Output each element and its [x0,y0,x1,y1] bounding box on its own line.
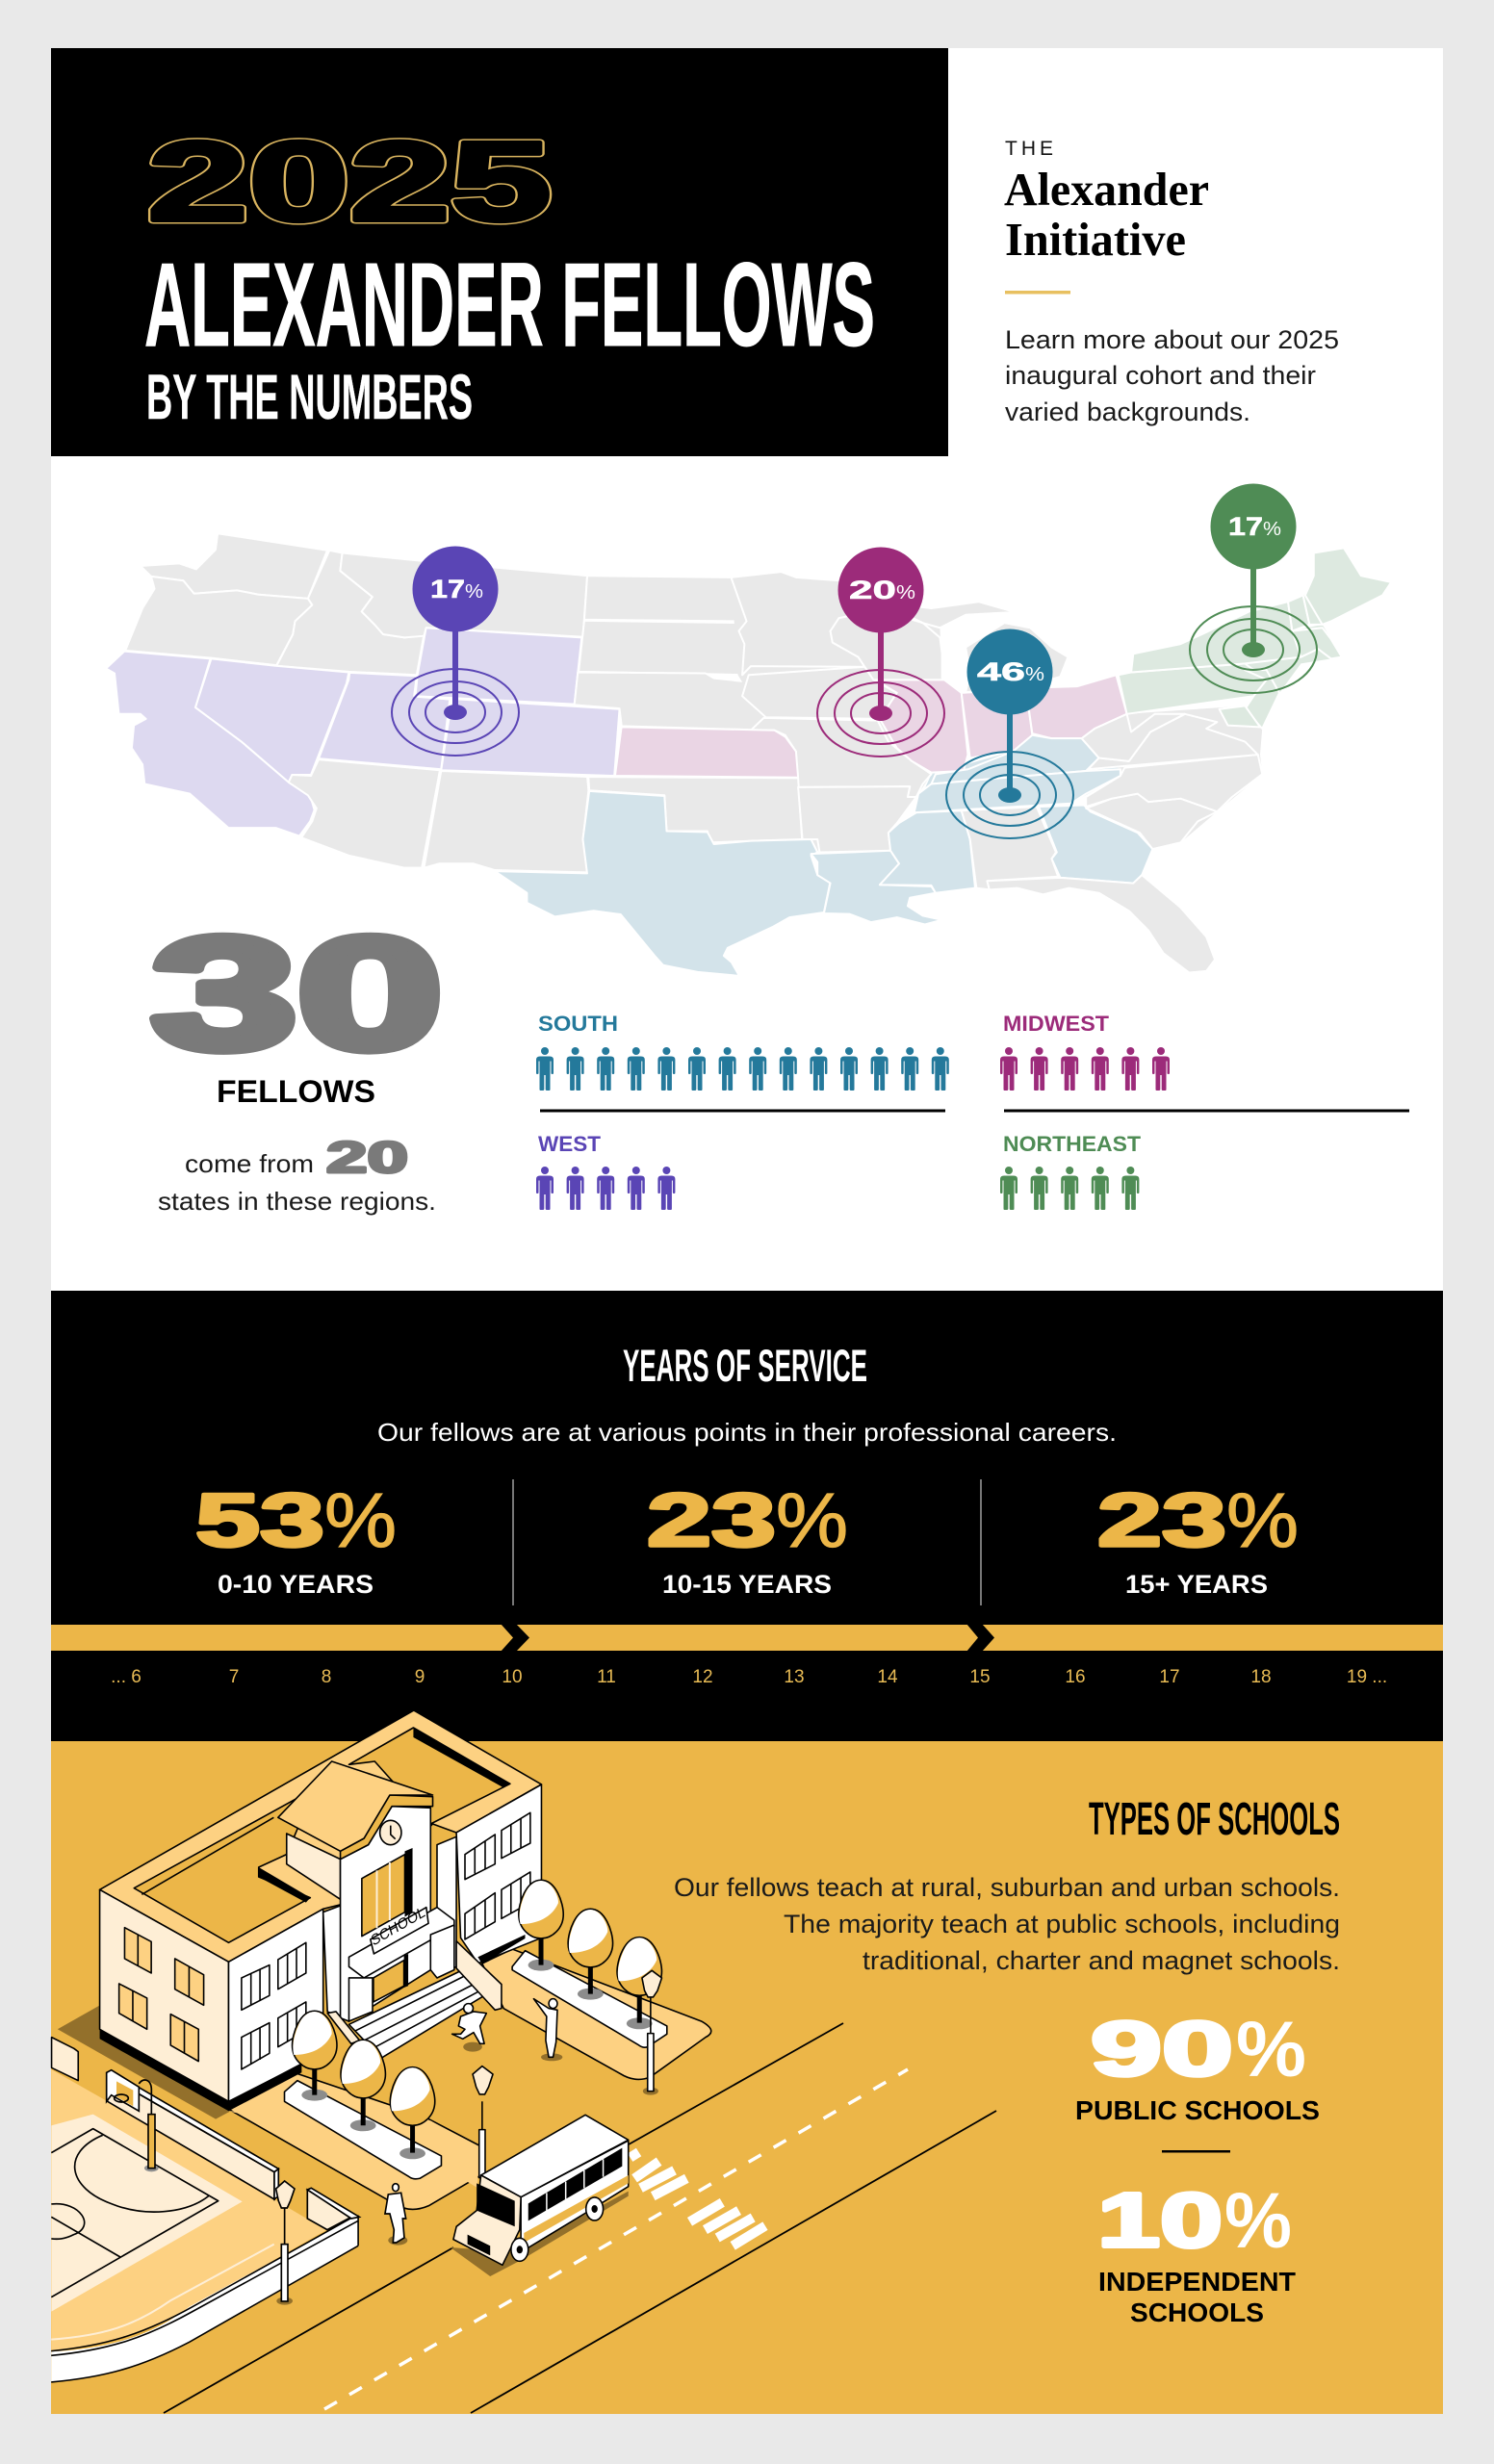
map pin: West 17%: % [465,581,483,603]
map pin: Northeast 17%: % [1263,519,1281,540]
illustration: school building [100,1710,541,2111]
left wing windows [119,1928,204,2062]
stat: 30 fellows: FELLOWS [217,1074,375,1109]
timeline year labels [111,1667,1387,1687]
timeline band [51,1624,1443,1652]
stairs [348,1970,484,2058]
panel: types of schools background [51,1741,1443,2414]
stat: 23%: % [1226,1477,1299,1563]
map pin: Northeast 17% [1190,483,1317,693]
illustration: pedestrian [385,2184,407,2246]
stat: 10% independent schools: SCHOOLS [1130,2297,1264,2327]
illustration: people and planters [285,1880,667,2179]
year outline: 2025 [147,118,552,245]
map pin: Midwest 20% [817,547,944,757]
subtitle: BY THE NUMBERS [146,361,473,432]
schools description [674,1873,1340,1975]
panel: years of service [51,1291,1443,1741]
timeline year labels: 13 [784,1667,805,1687]
illustration: school bus [451,2115,629,2276]
stat: 30 fellows: states in these regions. [158,1187,436,1216]
illustration: right plaza ground [228,1949,711,2188]
stat: 53% [195,1477,397,1599]
stat: 30 fellows: come from [185,1149,314,1178]
entrance marquee [348,1908,454,1978]
map pin: South 46%: 46 [977,657,1025,686]
map pin: South 46%: % [1025,664,1044,685]
description: Our fellows are at various points in their professional careers. [377,1418,1117,1447]
stat: 90% public schools: 90 [1091,2006,1233,2092]
road lines [164,2023,996,2413]
left wing [100,1889,228,2101]
timeline year labels: 9 [415,1667,425,1687]
map pin: Northeast 17%: 17 [1228,512,1263,541]
map pin: South 46% [946,629,1073,838]
heading: YEARS OF SERVICE [623,1340,867,1391]
region: West [536,1132,675,1210]
stat: 53%: % [324,1477,397,1563]
map of the United States [106,533,1391,976]
runner [452,2004,486,2052]
region: Midwest [1000,1012,1170,1091]
stat: 53%: 0-10 YEARS [218,1570,374,1599]
map pin: Midwest 20%: % [896,582,915,603]
stat: 23% [647,1477,848,1599]
stat: 23%: 10-15 YEARS [662,1570,832,1599]
intro text: inaugural cohort and their [1005,361,1316,390]
stat: 10% independent schools [1097,2177,1296,2327]
stat: 23% [1097,1477,1299,1599]
timeline year labels: 19 ... [1347,1667,1387,1687]
logo: The Alexander Initiative [1004,138,1209,266]
timeline year labels: 14 [877,1667,898,1687]
map pin: West 17%: 17 [430,575,465,603]
region: Midwest: MIDWEST [1003,1012,1110,1036]
building roof [100,1710,541,1962]
timeline year labels: 11 [597,1667,616,1687]
logo: The Alexander Initiative: Initiative [1005,213,1186,266]
timeline year labels: ... 6 [111,1667,142,1687]
stat: 90% public schools: % [1236,2006,1306,2093]
region: South [536,1012,949,1091]
timeline year labels: 8 [322,1667,331,1687]
map pin: Midwest 20%: 20 [849,576,896,604]
region: Northeast [1000,1132,1142,1210]
year outline [147,118,552,245]
timeline year labels: 16 [1065,1667,1086,1687]
street lamp: centre [473,2066,493,2178]
timeline year labels: 12 [692,1667,713,1687]
timeline year labels: 10 [502,1667,523,1687]
schools description: The majority teach at public schools, including [784,1910,1340,1938]
stat: 23%: % [776,1477,848,1563]
stat: 23%: 15+ YEARS [1125,1570,1268,1599]
timeline year labels: 15 [969,1667,991,1687]
stat: 10% independent schools: 10 [1097,2177,1223,2263]
illustration: plaza ground [229,2069,481,2209]
stat: 10% independent schools: INDEPENDENT [1098,2267,1296,2297]
stat: 30 fellows [151,905,443,1216]
stat: 30 fellows: 20 [326,1133,408,1182]
white card [51,48,1443,1292]
illustration: court wall and hoop [107,2070,359,2305]
intro text: varied backgrounds. [1005,398,1250,426]
street lamp: right [642,1970,661,2095]
teacher [533,1999,562,2061]
school sign text: SCHOOL [370,1904,427,1950]
planter: right [512,1951,667,2047]
planter: left [285,2081,441,2179]
illustration: basketball court [51,2069,358,2382]
clock tower [287,1834,341,1899]
stat: 90% public schools [1075,2006,1320,2125]
map pin: West 17% [392,547,519,756]
timeline year labels: 7 [229,1667,239,1687]
crosswalk [631,2152,765,2246]
region: West: WEST [538,1132,602,1156]
logo: The Alexander Initiative: Alexander [1004,163,1209,216]
illustration: ground shadow and side wall [52,2006,231,2119]
region: South: SOUTH [538,1012,618,1036]
panel: header [51,48,948,456]
timeline year labels: 18 [1250,1667,1272,1687]
timeline year labels: 17 [1159,1667,1180,1687]
schools description: traditional, charter and magnet schools. [863,1946,1340,1975]
rule between stats [1162,2150,1230,2152]
stat: 23%: 23 [1097,1477,1226,1562]
title: ALEXANDER FELLOWS [144,240,875,372]
stat: 10% independent schools: % [1224,2177,1292,2265]
intro text: Learn more about our 2025 [1005,325,1339,354]
schools description: Our fellows teach at rural, suburban and urban schools. [674,1873,1340,1902]
region: Northeast: NORTHEAST [1003,1132,1142,1156]
stat: 90% public schools: PUBLIC SCHOOLS [1075,2095,1320,2125]
columns [348,1978,373,2021]
trees [315,1937,639,2153]
stat: 23%: 23 [647,1477,776,1562]
stat: 53%: 53 [195,1477,324,1562]
stat: 30 fellows: 30 [151,905,443,1082]
year outline: 2025 [147,118,552,245]
intro text [1005,325,1339,426]
gold rule [1005,291,1070,295]
logo: The Alexander Initiative: THE [1005,138,1053,160]
right wing [456,1784,541,1964]
